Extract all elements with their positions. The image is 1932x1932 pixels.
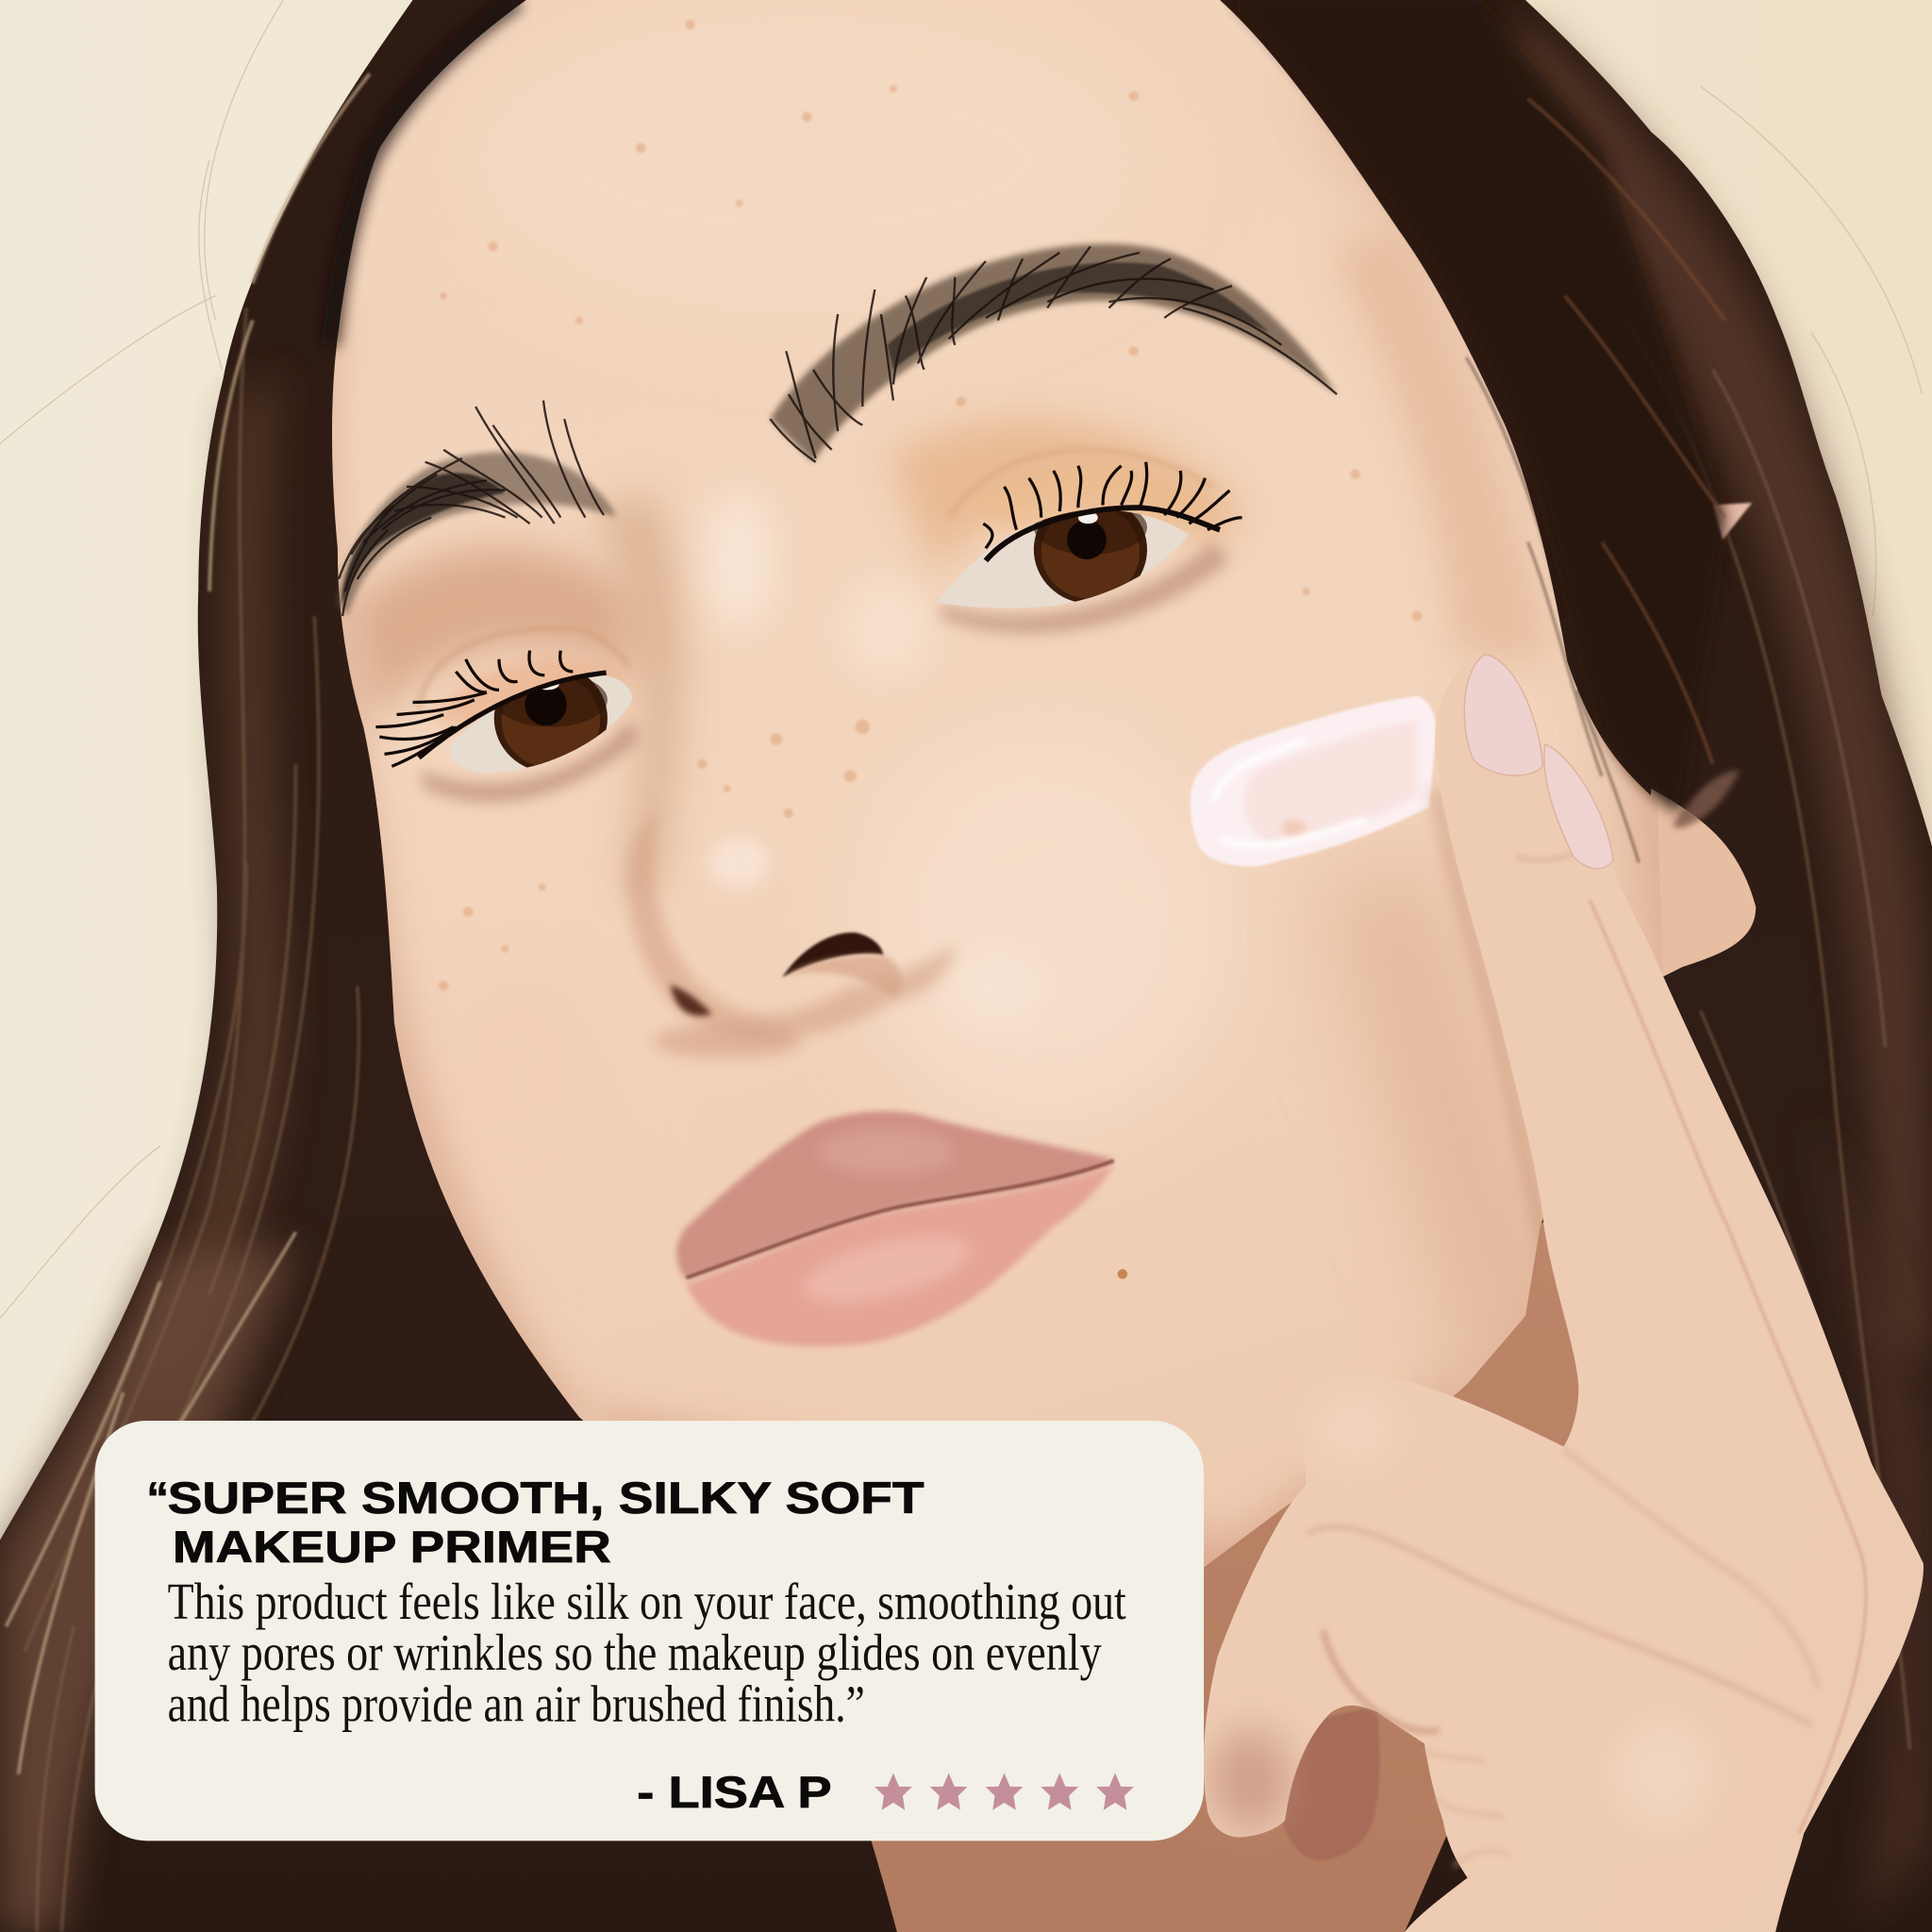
nose bridge shadow: [591, 487, 683, 899]
lashes: [375, 651, 607, 766]
review heading: MAKEUP PRIMER: [173, 1522, 611, 1572]
review body text: [168, 1573, 1126, 1733]
cheek shadow beside finger: [1315, 849, 1540, 1342]
cheek glow: [874, 759, 1223, 1126]
review card: [95, 1421, 1204, 1840]
index finger crease to middle finger: [1590, 899, 1866, 1834]
jaw shadow: [591, 1385, 1455, 1567]
iris: [1034, 495, 1147, 604]
iris: [494, 664, 608, 773]
brown hair tone left: [124, 370, 286, 1380]
main hand: [1204, 656, 1924, 1932]
lower lid shadow: [419, 721, 639, 802]
reviewer name: - LISA P: [637, 1767, 832, 1817]
eye socket left: [351, 546, 641, 727]
knuckle highlight: [1614, 1719, 1713, 1830]
lashes: [983, 462, 1242, 560]
brown hair tone lower left: [0, 1244, 295, 1932]
nail middle: [1544, 744, 1613, 869]
lower lip: [687, 1164, 1114, 1346]
lid crease: [419, 628, 628, 708]
finger contact shadow: [1436, 789, 1553, 1281]
nostril left: [671, 985, 712, 1016]
left eye: [375, 628, 639, 802]
sclera: [450, 675, 632, 773]
hand and fingers: [1204, 655, 1924, 1932]
left eyebrow: [338, 400, 616, 616]
sclera: [937, 509, 1189, 608]
nose: [627, 808, 958, 1058]
wrist wrinkles: [1424, 1750, 1509, 1867]
thumb web crease: [1324, 1630, 1440, 1731]
face: [332, 0, 1664, 1568]
cream swatch: [1191, 696, 1436, 866]
shadow edges of the face: [332, 313, 586, 1421]
brown hair tone right: [1478, 25, 1932, 1356]
upper lip: [676, 1111, 1114, 1279]
review heading: SUPER SMOOTH, SILKY SOFT: [168, 1473, 924, 1523]
lip line: [687, 1160, 1114, 1277]
right eyebrow: [770, 244, 1337, 462]
review heading: “: [146, 1473, 169, 1523]
knuckle creases: [1516, 848, 1583, 860]
lower curled finger crease: [1306, 1526, 1811, 1725]
upper curled finger crease: [1563, 1449, 1818, 1688]
hair shadow at left hairline: [330, 0, 518, 345]
review body text: any pores or wrinkles so the makeup glides on evenly: [168, 1624, 1102, 1681]
nostril right: [782, 933, 883, 977]
brown hair tone lower right: [1811, 1109, 1932, 1923]
forehead tone: [456, 0, 1146, 321]
nose shadow below: [653, 1024, 801, 1058]
second finger tip shade: [1208, 1728, 1292, 1832]
review body text: This product feels like silk on your face, smoothing out: [168, 1573, 1126, 1630]
loose flyaway hairs: [0, 0, 1923, 1319]
eye socket right: [887, 418, 1244, 579]
nose highlights: [705, 492, 774, 628]
bright hair highlights left edge: [7, 74, 370, 1774]
five star rating: [874, 1774, 1134, 1810]
lips: [676, 1111, 1114, 1346]
freckles: [439, 20, 1422, 991]
hair fringe over the temple: [1232, 0, 1725, 862]
review heading: [146, 1473, 924, 1572]
neck: [789, 1208, 1602, 1932]
lower lid shadow: [939, 542, 1230, 633]
curled third finger: [1279, 1707, 1380, 1860]
right eye: [937, 450, 1242, 633]
ear: [1645, 503, 1756, 986]
review body text: and helps provide an air brushed finish.”: [168, 1675, 865, 1733]
temple warm shadow: [1331, 234, 1553, 665]
nail index: [1464, 655, 1542, 775]
